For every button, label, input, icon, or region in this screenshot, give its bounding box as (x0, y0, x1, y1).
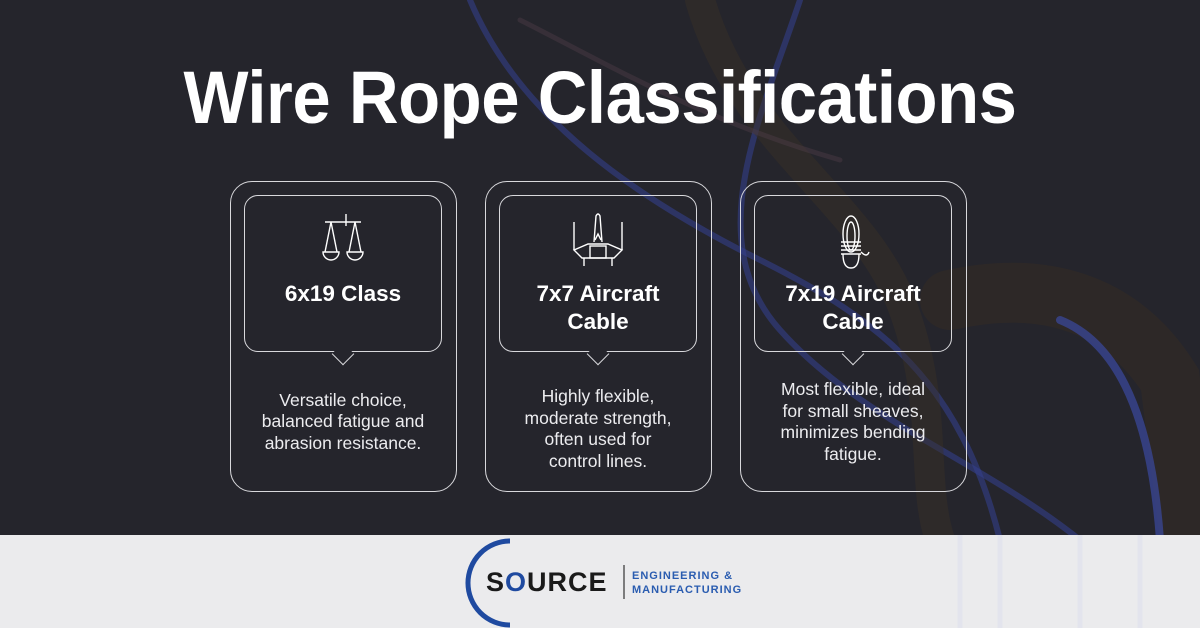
icon: coiled rope (841, 215, 870, 269)
heading (785, 281, 921, 334)
icon: aircraft (572, 213, 624, 266)
logo: ENGINEERING & (632, 570, 733, 582)
footer (0, 535, 1200, 628)
heading: 7x19 Aircraft (785, 281, 921, 306)
description (525, 386, 671, 470)
description: fatigue. (824, 444, 882, 464)
faint wires through footer (0, 535, 1200, 628)
description: Highly flexible, (542, 386, 654, 406)
logo: MANUFACTURING (632, 584, 742, 596)
card: 7x19 aircraft cable (740, 181, 967, 492)
description: often used for (544, 429, 652, 449)
pointer (332, 343, 354, 365)
heading: Cable (822, 309, 884, 334)
logo (466, 538, 742, 628)
description: Versatile choice, (279, 390, 407, 410)
description: minimizes bending (781, 422, 925, 442)
title: Wire Rope Classifications (184, 56, 1016, 139)
description: for small sheaves, (782, 400, 924, 420)
heading (536, 281, 660, 334)
logo: SOURCE (486, 567, 608, 597)
card: 7x7 aircraft cable (485, 181, 712, 492)
description (262, 390, 424, 453)
description: control lines. (549, 450, 647, 470)
heading: Cable (567, 309, 629, 334)
card: 6x19 class (230, 181, 457, 492)
heading: 6x19 Class (285, 281, 401, 306)
icon: scales (322, 214, 364, 261)
description: Most flexible, ideal (781, 379, 925, 399)
description: abrasion resistance. (265, 433, 421, 453)
heading: 7x7 Aircraft (536, 281, 659, 306)
pointer (842, 343, 864, 365)
description: moderate strength, (525, 408, 671, 428)
pointer (587, 343, 609, 365)
description (781, 379, 925, 464)
description: balanced fatigue and (262, 411, 424, 431)
